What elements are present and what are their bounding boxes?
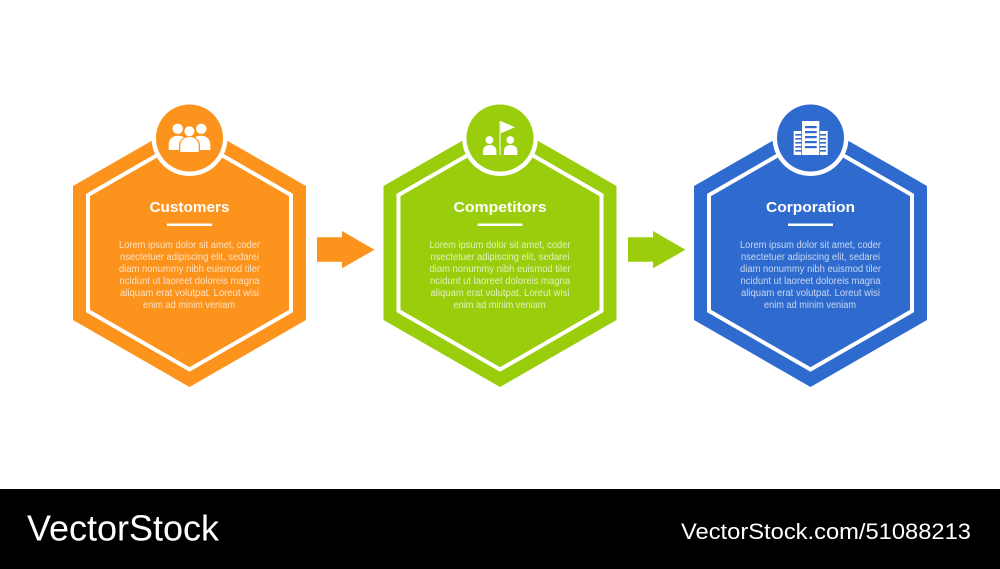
text block: corporation: Lorem ipsum dolor sit amet, coder [740,240,882,251]
orange outer hexagon [73,119,306,387]
text block: customers: ncidunt ut laoreet doloreis magna [120,276,260,287]
inner white hexagon outline [709,136,912,370]
underline [478,224,522,226]
heading: competitors: Competitors [454,199,546,216]
text block: corporation: nsectetuer adipiscing elit, sedarei [741,252,880,263]
footer logo text: VectorStock [27,508,220,548]
icon badge: customers [152,100,228,176]
text block: customers [119,240,261,311]
text block: customers: nsectetuer adipiscing elit, sedarei [120,252,259,263]
heading: corporation: Corporation [766,199,855,216]
text block: competitors: Lorem ipsum dolor sit amet, coder [430,240,571,251]
icon: group of people [169,124,210,152]
icon badge: corporation [772,100,848,176]
underline [788,224,833,226]
footer band [0,489,1000,569]
text block: competitors: diam nonummy nibh euismod tiler [430,264,571,275]
panel: competitors [384,100,616,387]
arrow: competitors to corporation [628,231,686,268]
arrow: customers to competitors [317,231,374,268]
icon badge: competitors [462,100,538,176]
text block: competitors: ncidunt ut laoreet doloreis magna [430,276,570,287]
icon: two people and flag [483,121,517,155]
text block: competitors: nsectetuer adipiscing elit, sedarei [430,252,570,263]
footer url text: VectorStock.com/51088213 [681,519,971,544]
inner white hexagon outline [88,136,291,370]
inner white hexagon outline [398,136,602,370]
icon: office buildings [794,121,828,155]
underline [167,224,212,226]
text block: competitors: aliquam erat volutpat. Loreut wisi [430,288,570,299]
text block: customers: diam nonummy nibh euismod tiler [119,264,261,275]
text block: customers: Lorem ipsum dolor sit amet, coder [119,240,261,251]
text block: corporation: ncidunt ut laoreet doloreis magna [740,276,881,287]
panel: corporation [694,100,927,387]
text block: corporation: diam nonummy nibh euismod tiler [740,264,882,275]
text block: competitors: enim ad minim veniam [454,300,546,311]
panel: customers [73,100,306,387]
green outer hexagon [384,119,616,387]
blue outer hexagon [694,119,927,387]
text block: competitors [430,240,571,311]
text block: corporation: aliquam erat volutpat. Loreut wisi [741,288,880,299]
text block: corporation: enim ad minim veniam [764,300,856,311]
text block: customers: enim ad minim veniam [143,300,235,311]
text block: corporation [740,240,882,311]
heading: customers: Customers [150,199,230,216]
text block: customers: aliquam erat volutpat. Loreut wisi [120,288,259,299]
